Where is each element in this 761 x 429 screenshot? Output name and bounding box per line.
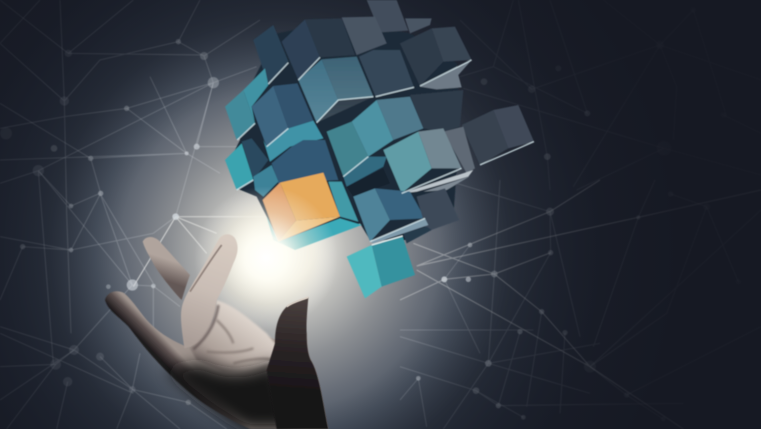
lower blue blocks bbox=[253, 140, 459, 243]
index finger bbox=[143, 237, 190, 300]
finger separation bbox=[190, 245, 222, 292]
palm creases bbox=[207, 320, 273, 363]
upper blocks bbox=[253, 0, 472, 123]
orange block bbox=[263, 173, 340, 242]
floating teal cube bbox=[347, 236, 415, 298]
lower right network lines and nodes bbox=[400, 180, 761, 429]
left teal blocks bbox=[225, 68, 323, 190]
palm bbox=[190, 300, 277, 372]
left network lines and nodes bbox=[0, 0, 267, 429]
core of cube bbox=[230, 20, 460, 248]
upper right network lines and nodes bbox=[460, 0, 761, 190]
light burst bbox=[194, 186, 338, 330]
back of hand and pinky bbox=[105, 291, 328, 429]
teal base behind orange block bbox=[267, 182, 362, 250]
cube assembly bbox=[225, 0, 534, 298]
right floating blocks bbox=[410, 90, 534, 173]
thumb bbox=[267, 297, 328, 429]
cube edge highlights bbox=[237, 57, 534, 242]
shadow at base of palm bbox=[167, 362, 293, 429]
hand bbox=[105, 234, 328, 429]
middle and ring fingers bbox=[181, 234, 238, 348]
centre blocks bbox=[327, 97, 473, 193]
knuckle shadow under fingers bbox=[193, 305, 218, 349]
thumb rim light bbox=[287, 297, 308, 307]
